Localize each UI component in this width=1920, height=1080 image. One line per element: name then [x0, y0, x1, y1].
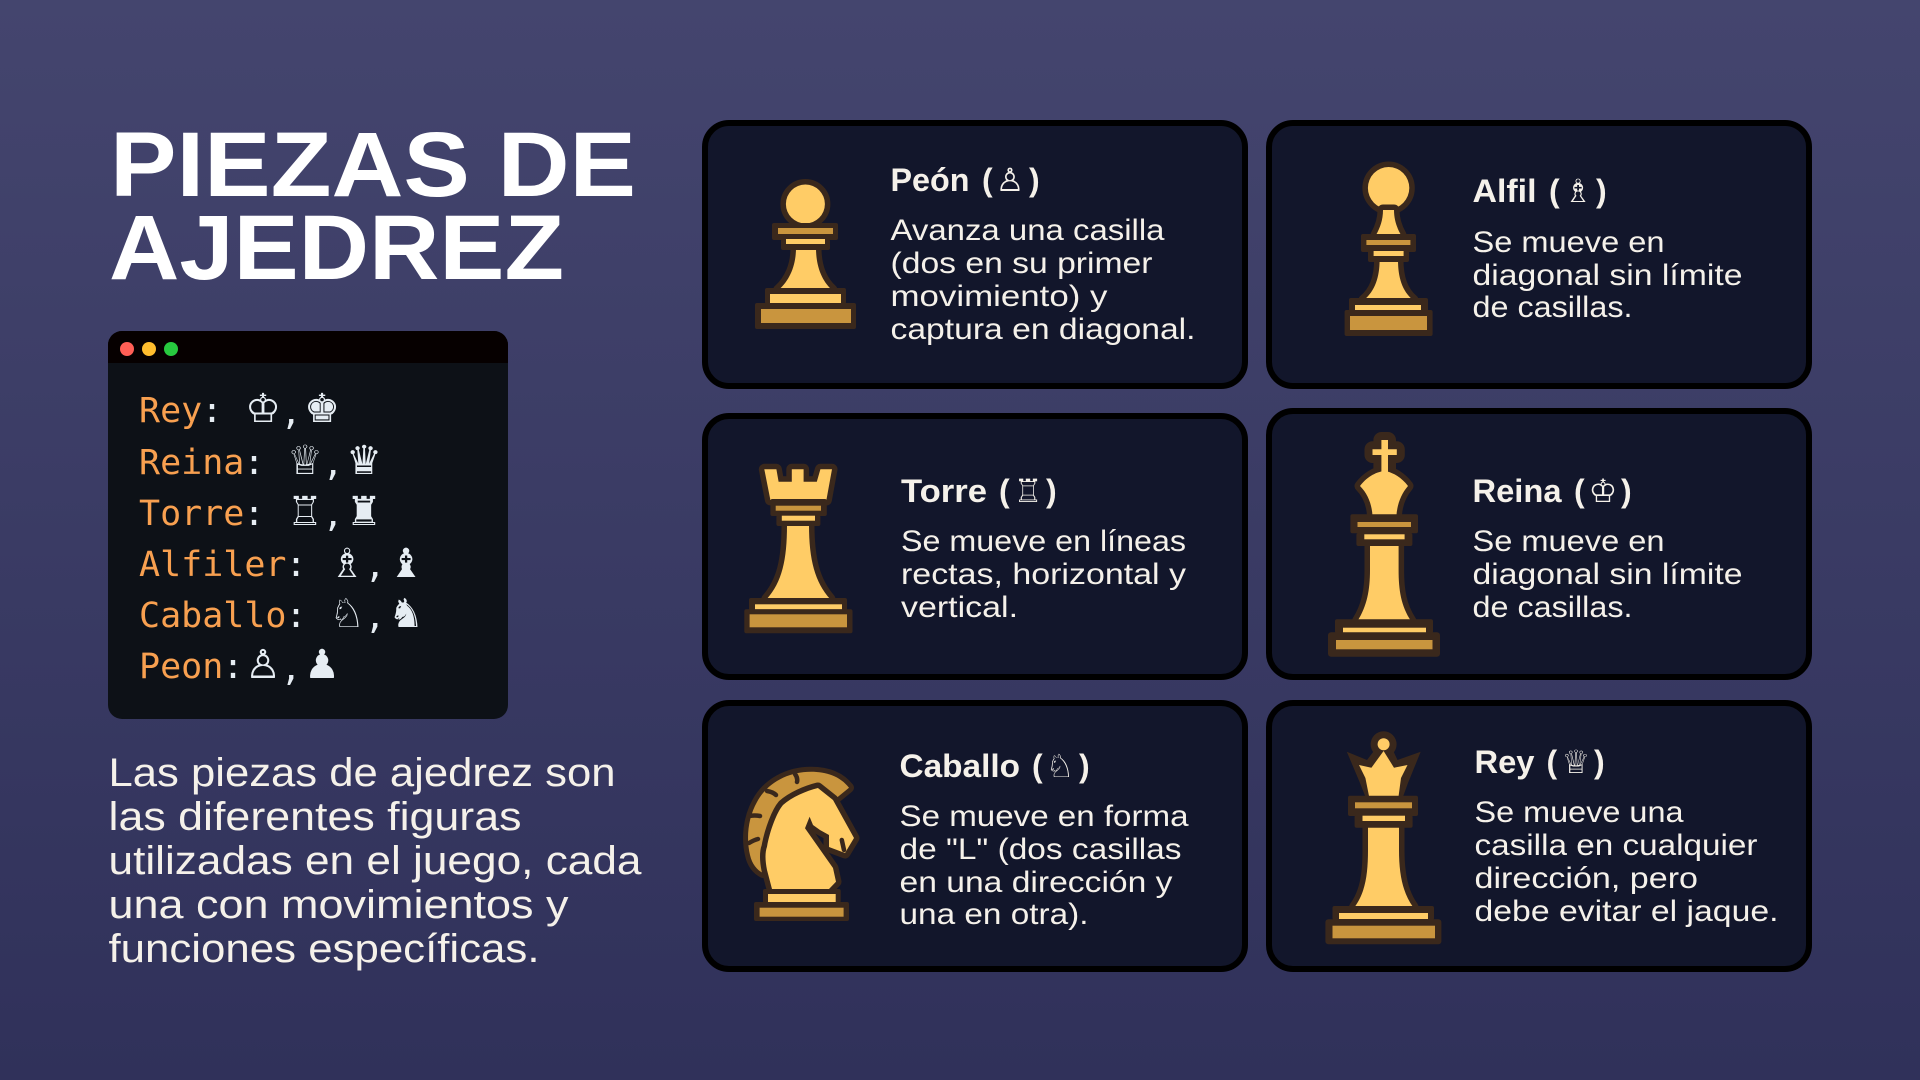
code line: Alfiler: [139, 541, 424, 587]
code line: Peon: [139, 642, 340, 689]
code line: Reina: ♛: [346, 438, 382, 484]
heading: Caballo: ): [1079, 748, 1090, 784]
heading: Alfil: (: [1549, 173, 1560, 209]
heading: Caballo: ♘: [1046, 747, 1074, 785]
panel: Reina: [1269, 411, 1809, 677]
window dots: [120, 342, 178, 356]
description: Caballo: una en otra).: [900, 898, 1088, 931]
code line: Caballo: ♘: [329, 591, 365, 637]
code line: Rey: Rey: [139, 391, 202, 431]
description: Rey: casilla en cualquier: [1474, 829, 1758, 862]
heading: Torre: [901, 472, 1057, 510]
code line: Torre: ♖: [287, 489, 323, 535]
description: Rey: [1474, 796, 1778, 928]
description: Reina: Se mueve en: [1472, 525, 1664, 558]
title: AJEDREZ: [109, 197, 564, 299]
intro paragraph: Las piezas de ajedrez son: [108, 751, 616, 795]
description: Alfil: diagonal sin límite: [1472, 259, 1742, 292]
title: PIEZAS DE: [110, 114, 636, 216]
code line: Rey: ,: [280, 393, 302, 433]
heading: Alfil: [1472, 172, 1607, 210]
description: Alfil: Se mueve en: [1472, 226, 1664, 259]
description: Reina: [1472, 525, 1742, 624]
code line: Reina: ,: [322, 444, 344, 484]
icon: bishop: [1345, 167, 1433, 336]
heading: Peón: Peón: [890, 162, 970, 198]
description: Peón: [890, 214, 1196, 346]
description: Rey: Se mueve una: [1474, 796, 1684, 829]
description: Caballo: de "L" (dos casillas: [900, 833, 1182, 866]
heading: Alfil: Alfil: [1472, 173, 1536, 209]
heading: Torre: ): [1046, 473, 1057, 509]
code line: Torre: ,: [322, 495, 344, 535]
panel: Peón: [705, 123, 1245, 386]
intro paragraph: [108, 751, 642, 971]
heading: Reina: [1472, 472, 1632, 510]
icon: pawn: [755, 184, 856, 329]
code line: Torre: ♜: [346, 489, 382, 535]
heading: Alfil: ♗: [1564, 172, 1592, 210]
description: Torre: vertical.: [901, 591, 1018, 624]
code line: Peon: :: [222, 647, 244, 687]
icon: rook: [744, 469, 852, 633]
code line: Torre: Torre: [139, 494, 244, 534]
code line: Caballo: :: [285, 596, 307, 636]
description: Torre: [901, 525, 1186, 624]
code line: Reina: Reina: [139, 443, 244, 483]
window title bar: [108, 331, 508, 363]
code line: Alfiler: ♗: [329, 541, 365, 587]
description: Caballo: Se mueve en forma: [900, 800, 1189, 833]
description: Rey: debe evitar el jaque.: [1474, 895, 1778, 928]
heading: Peón: ♙: [996, 161, 1024, 199]
panel: Torre: [705, 416, 1245, 677]
code line: Rey: :: [201, 391, 223, 431]
code line: Torre: [139, 489, 382, 535]
description: Peón: (dos en su primer: [890, 247, 1152, 280]
icon: queen: [1325, 731, 1441, 944]
heading: Rey: ♕: [1562, 743, 1590, 781]
heading: Rey: Rey: [1474, 744, 1535, 780]
code line: Rey: ♔: [245, 386, 281, 432]
heading: Rey: (: [1546, 744, 1558, 780]
panel: Rey: [1269, 703, 1809, 969]
description: Caballo: [900, 800, 1189, 931]
code line: Caballo: ♞: [388, 591, 424, 637]
code line: Alfiler: ♝: [388, 541, 424, 587]
title: [109, 114, 636, 299]
heading: Peón: ): [1029, 162, 1040, 198]
heading: Peón: (: [982, 162, 993, 198]
heading: Torre: ♖: [1014, 472, 1042, 510]
description: Peón: captura en diagonal.: [890, 313, 1196, 346]
code line: Reina: [139, 438, 382, 484]
description: Reina: diagonal sin límite: [1472, 558, 1742, 591]
heading: Rey: [1474, 743, 1605, 781]
panel: code window: [108, 331, 508, 719]
panel: Caballo: [705, 703, 1245, 969]
description: Caballo: en una dirección y: [900, 866, 1172, 899]
description: Peón: Avanza una casilla: [890, 214, 1165, 247]
description: Alfil: [1472, 226, 1742, 324]
code line: Peon: ♟: [304, 642, 340, 688]
code line: Caballo: Caballo: [139, 596, 287, 636]
code line: Alfiler: Alfiler: [139, 545, 287, 585]
code line: Reina: :: [243, 443, 265, 483]
description: Torre: Se mueve en líneas: [901, 525, 1186, 558]
heading: Reina: Reina: [1472, 473, 1562, 509]
code line: Peon: ,: [280, 649, 302, 689]
heading: Peón: [890, 161, 1040, 199]
code line: Peon: ♙: [245, 642, 281, 688]
heading: Reina: (: [1574, 473, 1585, 509]
heading: Torre: Torre: [901, 473, 987, 509]
description: Rey: dirección, pero: [1474, 862, 1698, 895]
description: Torre: rectas, horizontal y: [901, 558, 1186, 591]
heading: Reina: ♔: [1589, 472, 1617, 510]
code line: Torre: :: [243, 494, 265, 534]
heading: Caballo: (: [1032, 748, 1043, 784]
code line: Caballo: [139, 591, 424, 637]
description: Peón: movimiento) y: [890, 280, 1108, 313]
heading: Torre: (: [999, 473, 1010, 509]
code line: Rey: [139, 386, 340, 433]
intro paragraph: las diferentes figuras: [108, 795, 522, 839]
intro paragraph: utilizadas en el juego, cada: [108, 839, 642, 883]
heading: Caballo: Caballo: [900, 748, 1020, 784]
code line: Alfiler: ,: [364, 546, 386, 586]
code line: Reina: ♕: [287, 438, 323, 484]
heading: Caballo: [900, 747, 1090, 785]
heading: Alfil: ): [1596, 173, 1607, 209]
intro paragraph: funciones específicas.: [108, 927, 540, 971]
heading: Rey: ): [1594, 744, 1605, 780]
heading: Reina: ): [1621, 473, 1632, 509]
code line: Rey: ♚: [304, 386, 340, 432]
icon: knight: [748, 772, 854, 921]
intro paragraph: una con movimientos y: [108, 883, 568, 927]
description: Reina: de casillas.: [1472, 591, 1632, 624]
icon: king: [1328, 440, 1440, 657]
code line: Caballo: ,: [364, 597, 386, 637]
panel: Alfil: [1269, 123, 1809, 386]
code line: Alfiler: :: [285, 545, 307, 585]
code line: Peon: Peon: [139, 647, 223, 687]
description: Alfil: de casillas.: [1472, 291, 1632, 324]
